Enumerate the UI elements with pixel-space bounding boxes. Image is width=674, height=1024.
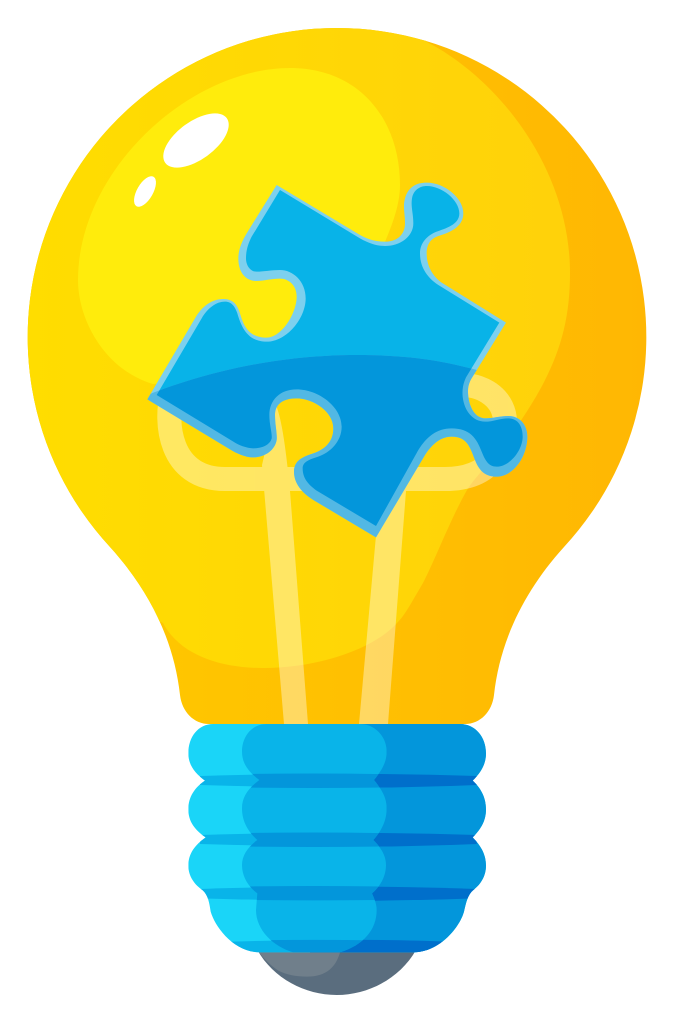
icon: filament: [169, 385, 505, 724]
icon: glass reflection large: [154, 103, 238, 178]
icon: glass bulb: [28, 28, 646, 724]
threaded collar: [188, 724, 486, 952]
socket tip: [257, 950, 416, 995]
icon: glass reflection small: [130, 173, 160, 210]
icon: screw base: [188, 724, 486, 995]
icon: puzzle piece: [147, 183, 527, 537]
